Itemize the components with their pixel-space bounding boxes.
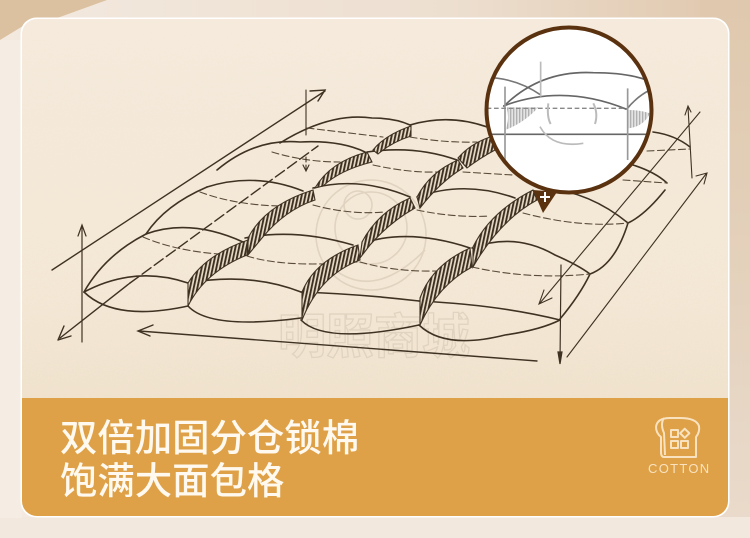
arrow: long top-left diagonal: [52, 90, 325, 270]
title: 双倍加固分仓锁棉: [60, 417, 359, 459]
icon: pin pointer: [533, 190, 557, 213]
arrow: right vertical down: [558, 265, 562, 364]
arrow: left vertical: [78, 225, 86, 342]
COTTON label: COTTON: [648, 461, 710, 476]
arrow: short vertical back: [303, 90, 309, 171]
watermark: [278, 180, 470, 364]
quilt diagram sketch: [52, 90, 707, 364]
title: [60, 417, 359, 502]
arrow: bottom width line: [138, 325, 537, 361]
icon: bread slice: [656, 418, 699, 457]
icon: cotton bread logo: [648, 418, 710, 476]
quilt dashed valley lines: [143, 128, 690, 276]
arrow: dashed centre diagonal: [58, 146, 318, 340]
quilt solid outlines: [84, 117, 690, 341]
arrow: right diagonals: [539, 106, 707, 357]
watermark: 明照商城: [278, 311, 470, 364]
hatched seam band B: [302, 137, 495, 320]
hatched seam band A: [188, 126, 411, 306]
title: 饱满大面包格: [60, 460, 284, 502]
magnifier callout: [486, 28, 652, 213]
hatched seam band C: [420, 190, 537, 325]
loupe circle with enlarged stitch detail: [486, 28, 652, 192]
